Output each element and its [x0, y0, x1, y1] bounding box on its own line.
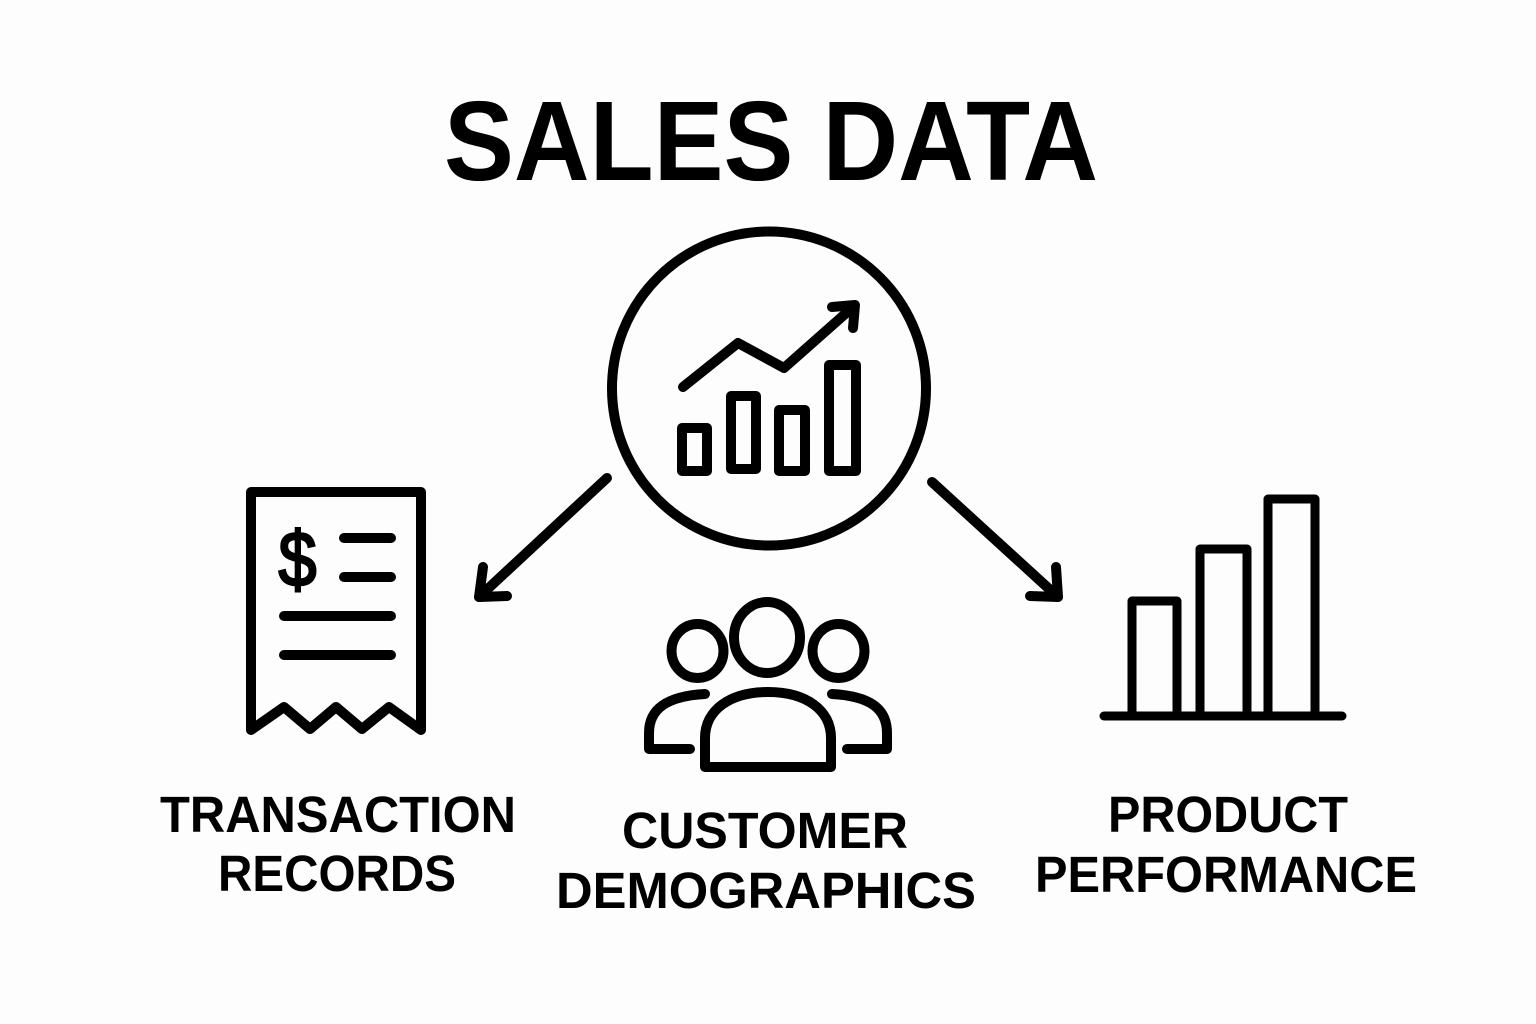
- label: transaction records: [160, 786, 516, 902]
- arrow: to transaction records: [479, 478, 607, 597]
- label: product performance: PRODUCT: [1108, 786, 1348, 843]
- icon: central circle with growth chart: [612, 232, 926, 546]
- label: transaction records: TRANSACTION: [160, 786, 516, 843]
- label: customer demographics: [556, 802, 976, 919]
- label: customer demographics: CUSTOMER: [622, 802, 908, 859]
- title: SALES DATA: [444, 78, 1098, 204]
- icon: product bar chart: [1104, 499, 1342, 716]
- arrow: to product performance: [932, 482, 1058, 597]
- icon: customers group: [649, 602, 887, 767]
- label: customer demographics: DEMOGRAPHICS: [556, 862, 976, 919]
- icon: receipt: $: [278, 515, 316, 603]
- label: product performance: PERFORMANCE: [1035, 846, 1417, 903]
- icon: receipt: [251, 492, 421, 730]
- label: product performance: [1035, 786, 1417, 903]
- label: transaction records: RECORDS: [218, 845, 456, 902]
